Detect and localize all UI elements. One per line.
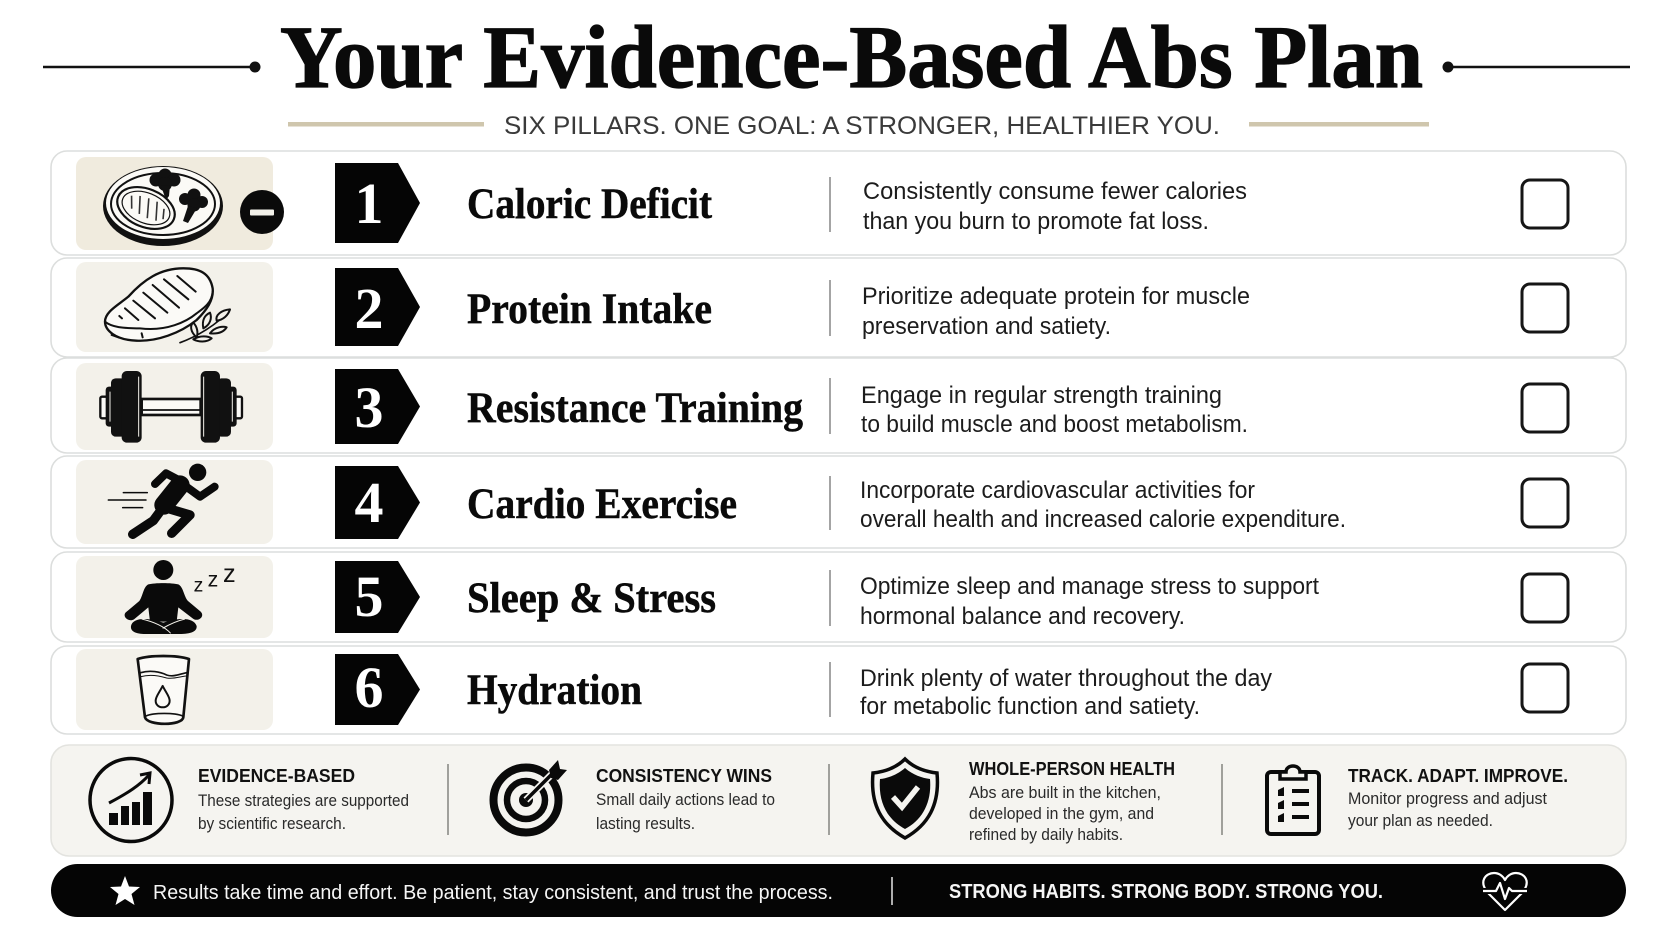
text: consistency wins: CONSISTENCY WINS	[596, 765, 772, 786]
subtitle accent: left	[288, 122, 484, 126]
text: consistency wins: Small daily actions lead to	[596, 791, 775, 809]
text: whole-person health	[969, 758, 1175, 844]
description: hormonal balance and recovery.	[860, 603, 1185, 630]
card	[51, 258, 1626, 357]
number tag 3: 3	[354, 375, 384, 440]
number tag 4	[335, 466, 420, 539]
checkbox	[1522, 479, 1568, 527]
card	[51, 151, 1626, 255]
text: track adapt improve: Monitor progress and adjust	[1348, 790, 1547, 808]
row 3: resistance training	[51, 358, 1626, 453]
panel: key principles	[51, 745, 1626, 856]
number tag 6	[335, 654, 420, 725]
icon panel	[76, 460, 273, 544]
icon: clipboard checklist	[1267, 766, 1319, 834]
row 4: cardio exercise	[51, 456, 1626, 548]
heading: Caloric Deficit	[467, 181, 713, 228]
checkbox	[1522, 574, 1568, 622]
description: Consistently consume fewer calories	[863, 178, 1247, 205]
description	[860, 665, 1272, 720]
title rule: right	[1442, 62, 1630, 72]
description	[860, 477, 1346, 533]
icon: meditating person: z	[194, 575, 203, 596]
text: whole-person health: WHOLE-PERSON HEALTH	[969, 758, 1175, 779]
heading: Cardio Exercise	[467, 481, 737, 528]
icon: shield with check	[873, 759, 937, 838]
icon: steak	[105, 268, 230, 343]
icon panel	[76, 157, 273, 250]
text: evidence-based	[198, 765, 409, 833]
description: Engage in regular strength training	[861, 382, 1222, 409]
icon: star	[110, 876, 140, 905]
text: track adapt improve: TRACK. ADAPT. IMPROVE.	[1348, 765, 1568, 786]
description: Optimize sleep and manage stress to support	[860, 573, 1319, 600]
subtitle: SIX PILLARS. ONE GOAL: A STRONGER, HEALTHIER YOU.	[504, 112, 1220, 140]
text: whole-person health: developed in the gym, and	[969, 805, 1154, 823]
icon panel	[76, 649, 273, 730]
text: whole-person health: refined by daily habits.	[969, 826, 1123, 844]
text: evidence-based: EVIDENCE-BASED	[198, 765, 355, 786]
icon: water glass	[138, 656, 189, 724]
description: Prioritize adequate protein for muscle	[862, 283, 1250, 310]
checkbox	[1522, 284, 1568, 332]
header	[43, 9, 1630, 140]
number tag 5: 5	[354, 564, 384, 629]
text: evidence-based: by scientific research.	[198, 815, 346, 833]
heading: Hydration	[467, 667, 642, 714]
description: Drink plenty of water throughout the day	[860, 665, 1272, 692]
description	[861, 382, 1248, 438]
description	[863, 178, 1247, 235]
icon panel	[76, 556, 273, 638]
description: overall health and increased calorie expenditure.	[860, 506, 1346, 533]
banner: closing message	[51, 864, 1626, 917]
number tag 3	[335, 369, 420, 444]
text: whole-person health: Abs are built in the kitchen,	[969, 784, 1161, 802]
text: track adapt improve: your plan as needed.	[1348, 812, 1493, 830]
row 5: sleep and stress	[51, 552, 1626, 642]
row 2: protein intake	[51, 258, 1626, 357]
icon panel	[76, 262, 273, 352]
card	[51, 552, 1626, 642]
icon panel	[76, 363, 273, 450]
row 6: hydration	[51, 646, 1626, 734]
icon: runner	[108, 464, 215, 534]
icon: heart with pulse	[1483, 873, 1527, 910]
icon: target with arrow	[494, 760, 567, 832]
heading: Resistance Training	[467, 385, 803, 432]
description: for metabolic function and satiety.	[860, 693, 1200, 720]
number tag 5	[335, 561, 420, 633]
icon: evidence chart	[90, 758, 172, 842]
description	[862, 283, 1250, 340]
text: evidence-based: These strategies are supported	[198, 792, 409, 810]
card	[51, 456, 1626, 548]
description: preservation and satiety.	[862, 313, 1111, 340]
number tag 6: 6	[354, 655, 384, 720]
number tag 1: 1	[354, 171, 384, 236]
icon: meditating person: z	[208, 567, 218, 591]
icon: meditating person	[125, 560, 236, 634]
text: track adapt improve	[1348, 765, 1568, 830]
number tag 1	[335, 163, 420, 243]
icon: minus badge	[240, 190, 284, 234]
checkbox	[1522, 384, 1568, 432]
title rule: left	[43, 62, 260, 72]
number tag 2	[335, 268, 420, 346]
description: to build muscle and boost metabolism.	[861, 411, 1248, 438]
text: consistency wins	[596, 765, 775, 833]
title: Your Evidence-Based Abs Plan	[280, 9, 1423, 107]
card	[51, 358, 1626, 453]
description: than you burn to promote fat loss.	[863, 208, 1209, 235]
checkbox	[1522, 664, 1568, 712]
icon: meditating person: z	[223, 560, 236, 588]
heading: Protein Intake	[467, 286, 712, 333]
subtitle accent: right	[1249, 122, 1429, 126]
description: Incorporate cardiovascular activities for	[860, 477, 1255, 504]
checkbox	[1522, 180, 1568, 228]
icon: plate	[103, 166, 223, 246]
banner text: patience: Results take time and effort. Be patient, stay consistent, and trust the process.	[153, 881, 833, 904]
heading: Sleep & Stress	[467, 575, 716, 622]
text: consistency wins: lasting results.	[596, 815, 695, 833]
banner text: strong habits: STRONG HABITS. STRONG BODY. STRONG YOU.	[949, 880, 1383, 903]
number tag 2: 2	[354, 276, 384, 341]
description	[860, 573, 1319, 630]
number tag 4: 4	[354, 470, 384, 535]
icon: dumbbell	[100, 371, 242, 443]
row 1: caloric deficit	[51, 151, 1626, 255]
card	[51, 646, 1626, 734]
